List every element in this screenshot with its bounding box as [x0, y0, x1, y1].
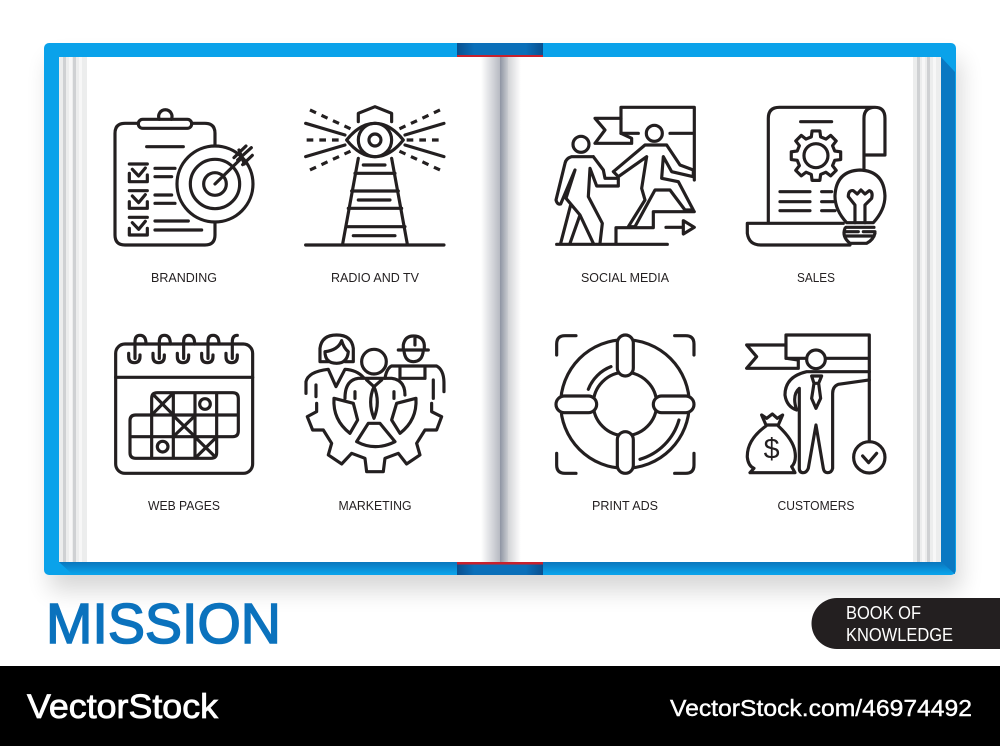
title: MISSION: [46, 592, 281, 656]
spine top: [457, 43, 543, 57]
man: [362, 349, 386, 374]
businessman: [807, 350, 825, 369]
flag: [621, 107, 694, 180]
left person: [573, 136, 589, 152]
icon: web pages calendar: [116, 335, 253, 473]
book: [44, 43, 956, 575]
footer logo: VectorStock: [27, 688, 219, 726]
worker: [398, 336, 428, 362]
label: sales: SALES: [797, 271, 835, 285]
footer bar: [0, 666, 1000, 746]
frame corners: [557, 336, 694, 473]
gear: [791, 131, 841, 180]
clipboard: [115, 123, 215, 245]
straps: [617, 335, 633, 376]
label: web pages: WEB PAGES: [148, 499, 220, 513]
icon: radio and tv lighthouse: [306, 107, 444, 245]
ring: [561, 340, 689, 468]
icon: customers businessman: $: [764, 434, 780, 466]
left page: [87, 57, 500, 562]
calendar body: [116, 344, 253, 473]
label: social media: SOCIAL MEDIA: [581, 271, 670, 285]
label: branding: BRANDING: [151, 271, 217, 285]
icon: branding: [115, 110, 253, 245]
book shadow: [50, 60, 960, 590]
label: customers: CUSTOMERS: [778, 499, 854, 513]
checkboxes: [129, 164, 147, 182]
icon: print ads lifebuoy: [556, 335, 694, 473]
blue cover: [44, 43, 956, 575]
light bulb: [835, 170, 885, 223]
stairs: [557, 212, 694, 244]
left page stack: [59, 57, 87, 562]
target: [177, 146, 253, 222]
scroll: [768, 107, 885, 222]
badge: book of knowledge: [812, 598, 1000, 649]
cover inner shade: [59, 57, 955, 574]
footer url: VectorStock.com/46974492: [670, 695, 972, 721]
spine bottom: [457, 562, 543, 575]
icon: marketing team and gear: [306, 335, 444, 472]
game grid: [130, 393, 238, 458]
tower: [306, 158, 444, 245]
book gutter: [481, 57, 521, 562]
check circle: [854, 442, 885, 473]
icon: social media climbing people: [556, 107, 694, 244]
label: marketing: MARKETING: [338, 499, 412, 513]
money bag: [747, 414, 795, 473]
badge text: BOOK OF: [846, 602, 921, 623]
label: print ads: PRINT ADS: [592, 499, 658, 513]
woman: [320, 335, 353, 362]
eye: [347, 123, 403, 157]
right page: [500, 57, 913, 562]
rays: [306, 123, 444, 157]
right person: [646, 125, 662, 141]
label: radio and tv: RADIO AND TV: [331, 271, 420, 285]
flag: [786, 335, 869, 442]
icon: sales scroll, gear and bulb: [747, 107, 885, 245]
badge text: KNOWLEDGE: [846, 624, 953, 645]
right page stack: [913, 57, 941, 562]
rings: [129, 335, 146, 363]
gear: [307, 403, 442, 472]
icon: customers businessman: [747, 335, 885, 473]
